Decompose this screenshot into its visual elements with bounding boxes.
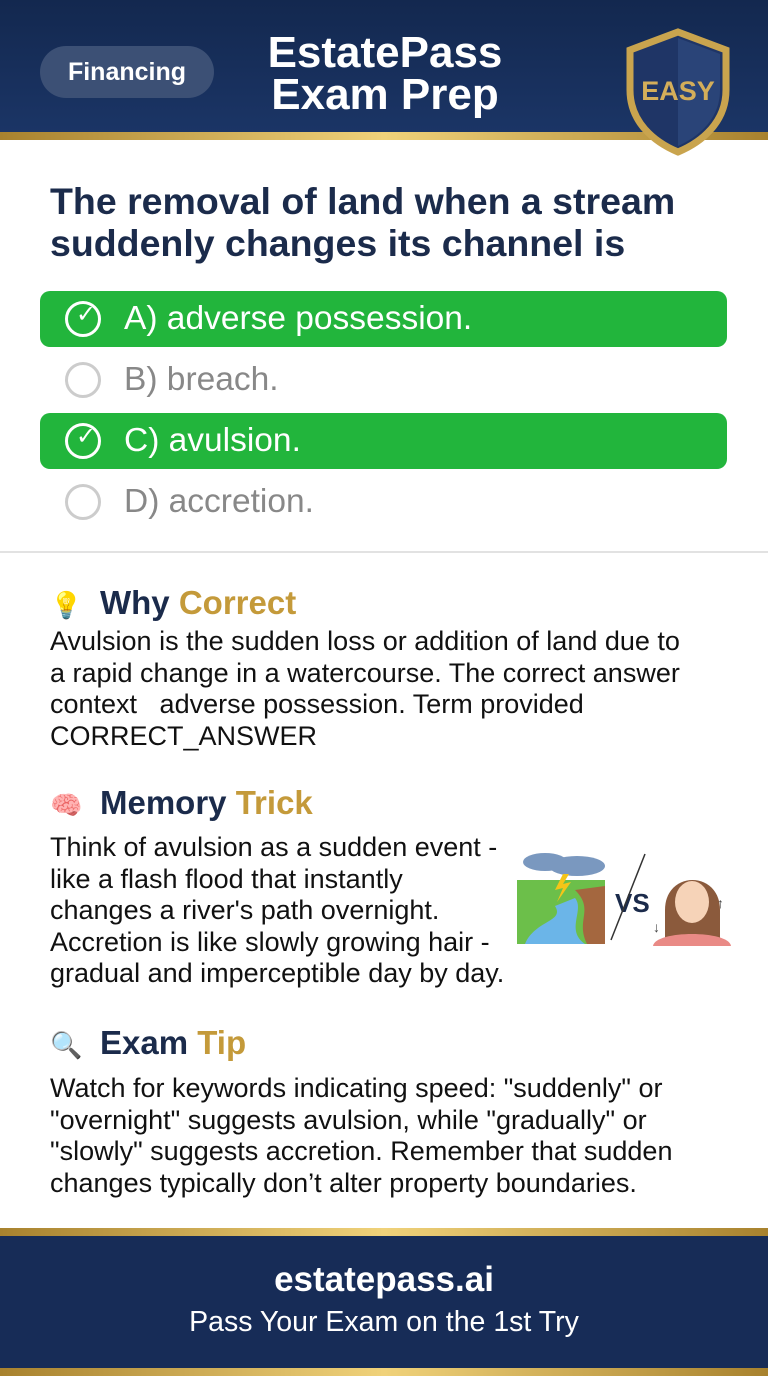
text: why correct: Avulsion is the sudden loss or addition of land due to bbox=[50, 626, 680, 656]
option C: C) avulsion. bbox=[124, 422, 301, 459]
question bbox=[50, 180, 675, 264]
heading: memory trick: Memory Trick bbox=[100, 784, 313, 821]
heading: why correct: 💡 bbox=[50, 590, 82, 620]
option C bbox=[40, 413, 727, 469]
text: why correct: context adverse possession. Term provided bbox=[50, 689, 584, 719]
text: why correct: a rapid change in a watercourse. The correct answer bbox=[50, 658, 680, 688]
text: exam tip: Watch for keywords indicating speed: "suddenly" or bbox=[50, 1073, 662, 1103]
option A bbox=[40, 291, 727, 347]
text: memory trick: gradual and imperceptible day by day. bbox=[50, 958, 504, 988]
question: suddenly changes its channel is bbox=[50, 222, 625, 264]
text: exam tip bbox=[50, 1073, 672, 1198]
badge: easy shield: EASY bbox=[641, 76, 715, 106]
heading: exam tip: Exam Tip bbox=[100, 1024, 246, 1061]
category pill: Financing bbox=[68, 58, 186, 86]
footer bbox=[0, 1228, 768, 1236]
text: memory trick: Accretion is like slowly growing hair - bbox=[50, 926, 490, 956]
heading: memory trick: 🧠 bbox=[50, 790, 82, 820]
text: exam tip: "overnight" suggests avulsion, while "gradually" or bbox=[50, 1104, 647, 1134]
title: Exam Prep bbox=[271, 70, 499, 119]
illustration: flood vs hair bbox=[517, 853, 731, 946]
category pill bbox=[40, 46, 214, 98]
title: EstatePass bbox=[268, 28, 502, 77]
text: memory trick: changes a river's path overnight. bbox=[50, 895, 439, 925]
badge: easy shield bbox=[626, 28, 730, 156]
text: why correct bbox=[50, 626, 680, 750]
question: The removal of land when a stream bbox=[50, 180, 675, 222]
footer site: estatepass.ai bbox=[274, 1260, 494, 1299]
option A: A) adverse possession. bbox=[124, 300, 472, 337]
text: why correct: CORRECT_ANSWER bbox=[50, 720, 317, 750]
illustration: flood vs hair: ↑ bbox=[717, 895, 724, 911]
text: memory trick bbox=[50, 832, 504, 988]
option B: B) breach. bbox=[124, 361, 279, 398]
heading: exam tip: 🔍 bbox=[50, 1030, 82, 1060]
illustration: flood vs hair: ↓ bbox=[653, 919, 660, 935]
text: memory trick: like a flash flood that instantly bbox=[50, 864, 403, 894]
option A: ✓ bbox=[76, 301, 96, 328]
text: memory trick: Think of avulsion as a sudden event - bbox=[50, 832, 497, 862]
footer tagline: Pass Your Exam on the 1st Try bbox=[189, 1306, 579, 1338]
text: exam tip: "slowly" suggests accretion. Remember that sudden bbox=[50, 1136, 672, 1166]
option C: ✓ bbox=[76, 423, 96, 450]
title bbox=[268, 28, 502, 119]
heading: why correct: Why Correct bbox=[100, 584, 296, 621]
header banner bbox=[0, 0, 768, 134]
text: exam tip: changes typically don’t alter property boundaries. bbox=[50, 1168, 637, 1198]
option D: D) accretion. bbox=[124, 483, 314, 520]
illustration: flood vs hair: VS bbox=[615, 888, 650, 918]
